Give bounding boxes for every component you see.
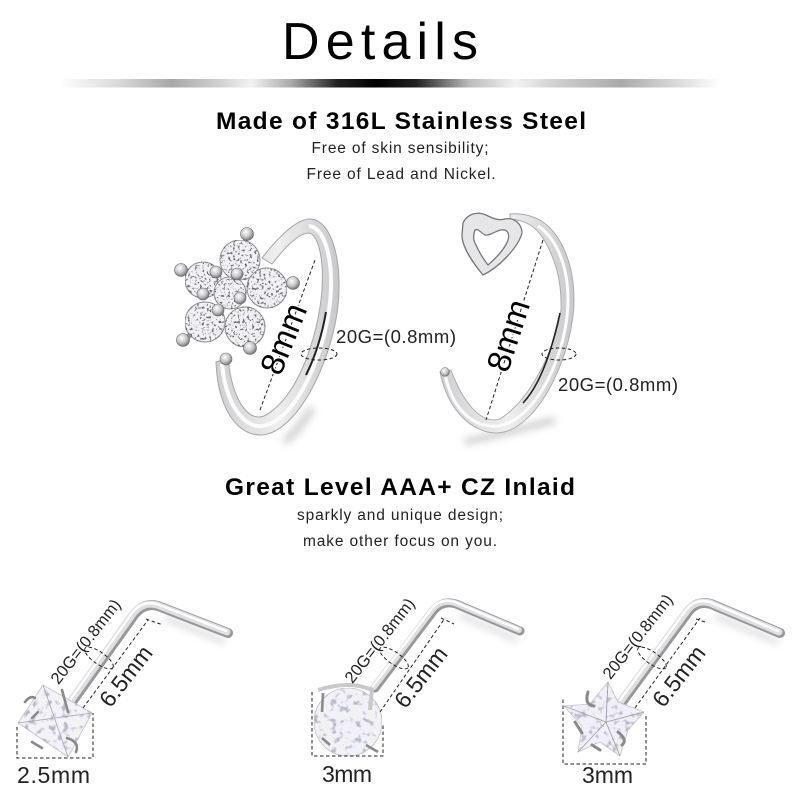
gauge ellipse (301, 348, 337, 360)
gem width bracket (563, 697, 646, 764)
round gem (314, 685, 382, 756)
text block: stone details: make other focus on you. (303, 533, 497, 550)
gauge ellipse (542, 348, 576, 360)
length dimension line (635, 618, 705, 708)
title: Details (282, 13, 478, 71)
ring shadow (465, 420, 555, 442)
text block: material details: Free of skin sensibility; (312, 140, 488, 157)
stud post (70, 603, 228, 702)
ring band (216, 219, 339, 435)
post shadow (460, 615, 518, 640)
heading: material: Made of 316L Stainless Steel (216, 108, 586, 135)
text block: material details: Free of Lead and Nickel. (306, 166, 496, 183)
gauge ellipse (82, 643, 116, 673)
text block: stone details (297, 507, 503, 550)
3mm label: 3mm (582, 762, 633, 788)
gauge ellipse (377, 643, 411, 673)
8mm dimension line (260, 260, 315, 410)
panel: round stud (312, 595, 520, 787)
heading: stones: Great Level AAA+ CZ Inlaid (225, 474, 575, 501)
6.5mm label: 6.5mm (647, 640, 711, 712)
gem width bracket (17, 713, 93, 758)
star gem (564, 682, 644, 756)
panel: star stud (563, 591, 780, 788)
stud post (620, 601, 780, 702)
panel: heart hoop ring (440, 213, 678, 442)
gauge label: 20G=(0.8mm) (558, 374, 678, 395)
post shadow (715, 616, 778, 642)
panel: flower hoop ring (174, 219, 456, 442)
heart charm (462, 213, 522, 275)
gauge ellipse (635, 643, 669, 673)
ring band (440, 214, 574, 433)
text block: material details (306, 140, 496, 183)
gauge label: 20G=(0.8mm) (47, 596, 125, 688)
length dimension line (380, 618, 454, 712)
gauge label: 20G=(0.8mm) (336, 326, 456, 347)
length dimension line (83, 619, 163, 708)
6.5mm label: 6.5mm (94, 640, 158, 712)
panel: square stud (17, 596, 228, 788)
8mm dimension line (486, 240, 543, 420)
gauge label: 20G=(0.8mm) (599, 591, 677, 683)
3mm label: 3mm (322, 761, 372, 787)
ring shadow (285, 408, 312, 442)
8mm label: 8mm (479, 295, 537, 376)
gauge label: 20G=(0.8mm) (341, 595, 419, 687)
square gem (18, 685, 92, 757)
2.5mm label: 2.5mm (17, 762, 90, 788)
gradient divider bar (60, 79, 720, 88)
gem width bracket (312, 692, 383, 756)
8mm label: 8mm (252, 298, 314, 380)
flower gem cluster (174, 228, 300, 354)
6.5mm label: 6.5mm (389, 641, 453, 713)
text block: stone details: sparkly and unique design; (297, 507, 503, 524)
stud post (373, 601, 520, 688)
post shadow (165, 618, 225, 642)
